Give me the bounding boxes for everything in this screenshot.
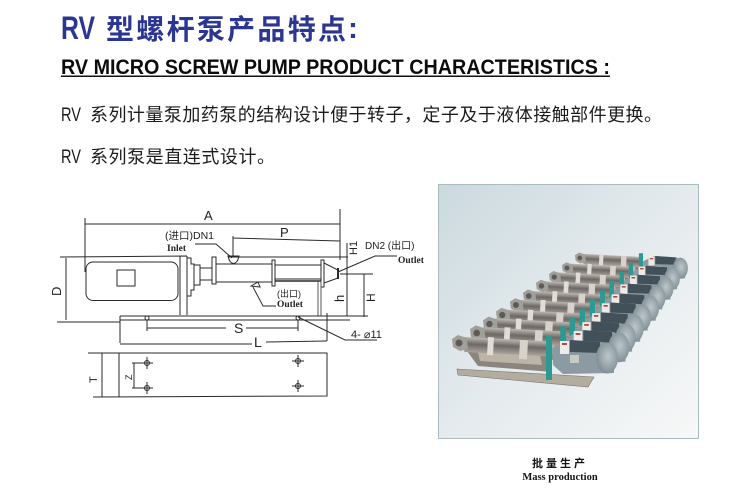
leader: outlet bottom bbox=[253, 287, 304, 310]
pump body bbox=[194, 256, 348, 316]
title: RV bbox=[61, 10, 96, 46]
leader: inlet bbox=[165, 230, 232, 258]
text block: feature 2: 系列泵是直连式设计。 bbox=[90, 147, 275, 167]
leader: inlet: (进口)DN1 bbox=[165, 230, 214, 242]
title: 型螺杆泵产品特点 bbox=[106, 14, 346, 45]
dimension H1 h H: H bbox=[364, 293, 378, 302]
leader: outlet bottom: (出口) bbox=[277, 288, 301, 299]
text block: feature 1: 系列计量泵加药泵的结构设计便于转子，定子及于液体接触部件更换。 bbox=[90, 105, 662, 125]
base plate bbox=[120, 313, 350, 343]
dimension L bbox=[120, 334, 327, 350]
leader: bolt holes: 4- ⌀11 bbox=[351, 329, 382, 341]
leader: bolt holes bbox=[145, 316, 382, 341]
dimension S bbox=[147, 320, 298, 336]
dimension D bbox=[49, 258, 120, 322]
subtitle: RV MICRO SCREW PUMP PRODUCT CHARACTERISTICS : bbox=[61, 56, 610, 79]
dimension D: D bbox=[49, 287, 64, 296]
leader: outlet top bbox=[338, 239, 425, 272]
leader: outlet top: Outlet bbox=[398, 256, 425, 266]
leader: outlet bottom: Outlet bbox=[277, 300, 304, 310]
leader: inlet: Inlet bbox=[167, 244, 187, 254]
motor bbox=[60, 256, 194, 315]
dimension drawing: side view bbox=[49, 208, 425, 350]
title bbox=[61, 10, 358, 46]
dimension L: L bbox=[254, 334, 262, 350]
photo: mass production pumps bbox=[438, 184, 698, 438]
dimension drawing: plan view: Z bbox=[124, 374, 134, 380]
caption: 批量生产 bbox=[532, 456, 588, 470]
dimension P bbox=[233, 225, 340, 257]
text block: feature 2: RV bbox=[61, 147, 81, 168]
caption: Mass production bbox=[522, 472, 598, 483]
caption bbox=[522, 456, 598, 483]
dimension H1 h H: h bbox=[332, 295, 347, 302]
dimension drawing: plan view bbox=[88, 353, 327, 397]
dimension A bbox=[85, 208, 340, 272]
title: : bbox=[348, 12, 358, 45]
dimension P: P bbox=[280, 225, 289, 240]
dimension A: A bbox=[204, 208, 213, 223]
text block: feature 1: RV bbox=[61, 105, 81, 126]
dimension H1 h H bbox=[332, 241, 378, 317]
dimension drawing: plan view: T bbox=[88, 376, 100, 383]
dimension H1 h H: H1 bbox=[348, 241, 360, 255]
dimension S: S bbox=[234, 320, 243, 336]
leader: outlet top: DN2 (出口) bbox=[365, 239, 414, 252]
